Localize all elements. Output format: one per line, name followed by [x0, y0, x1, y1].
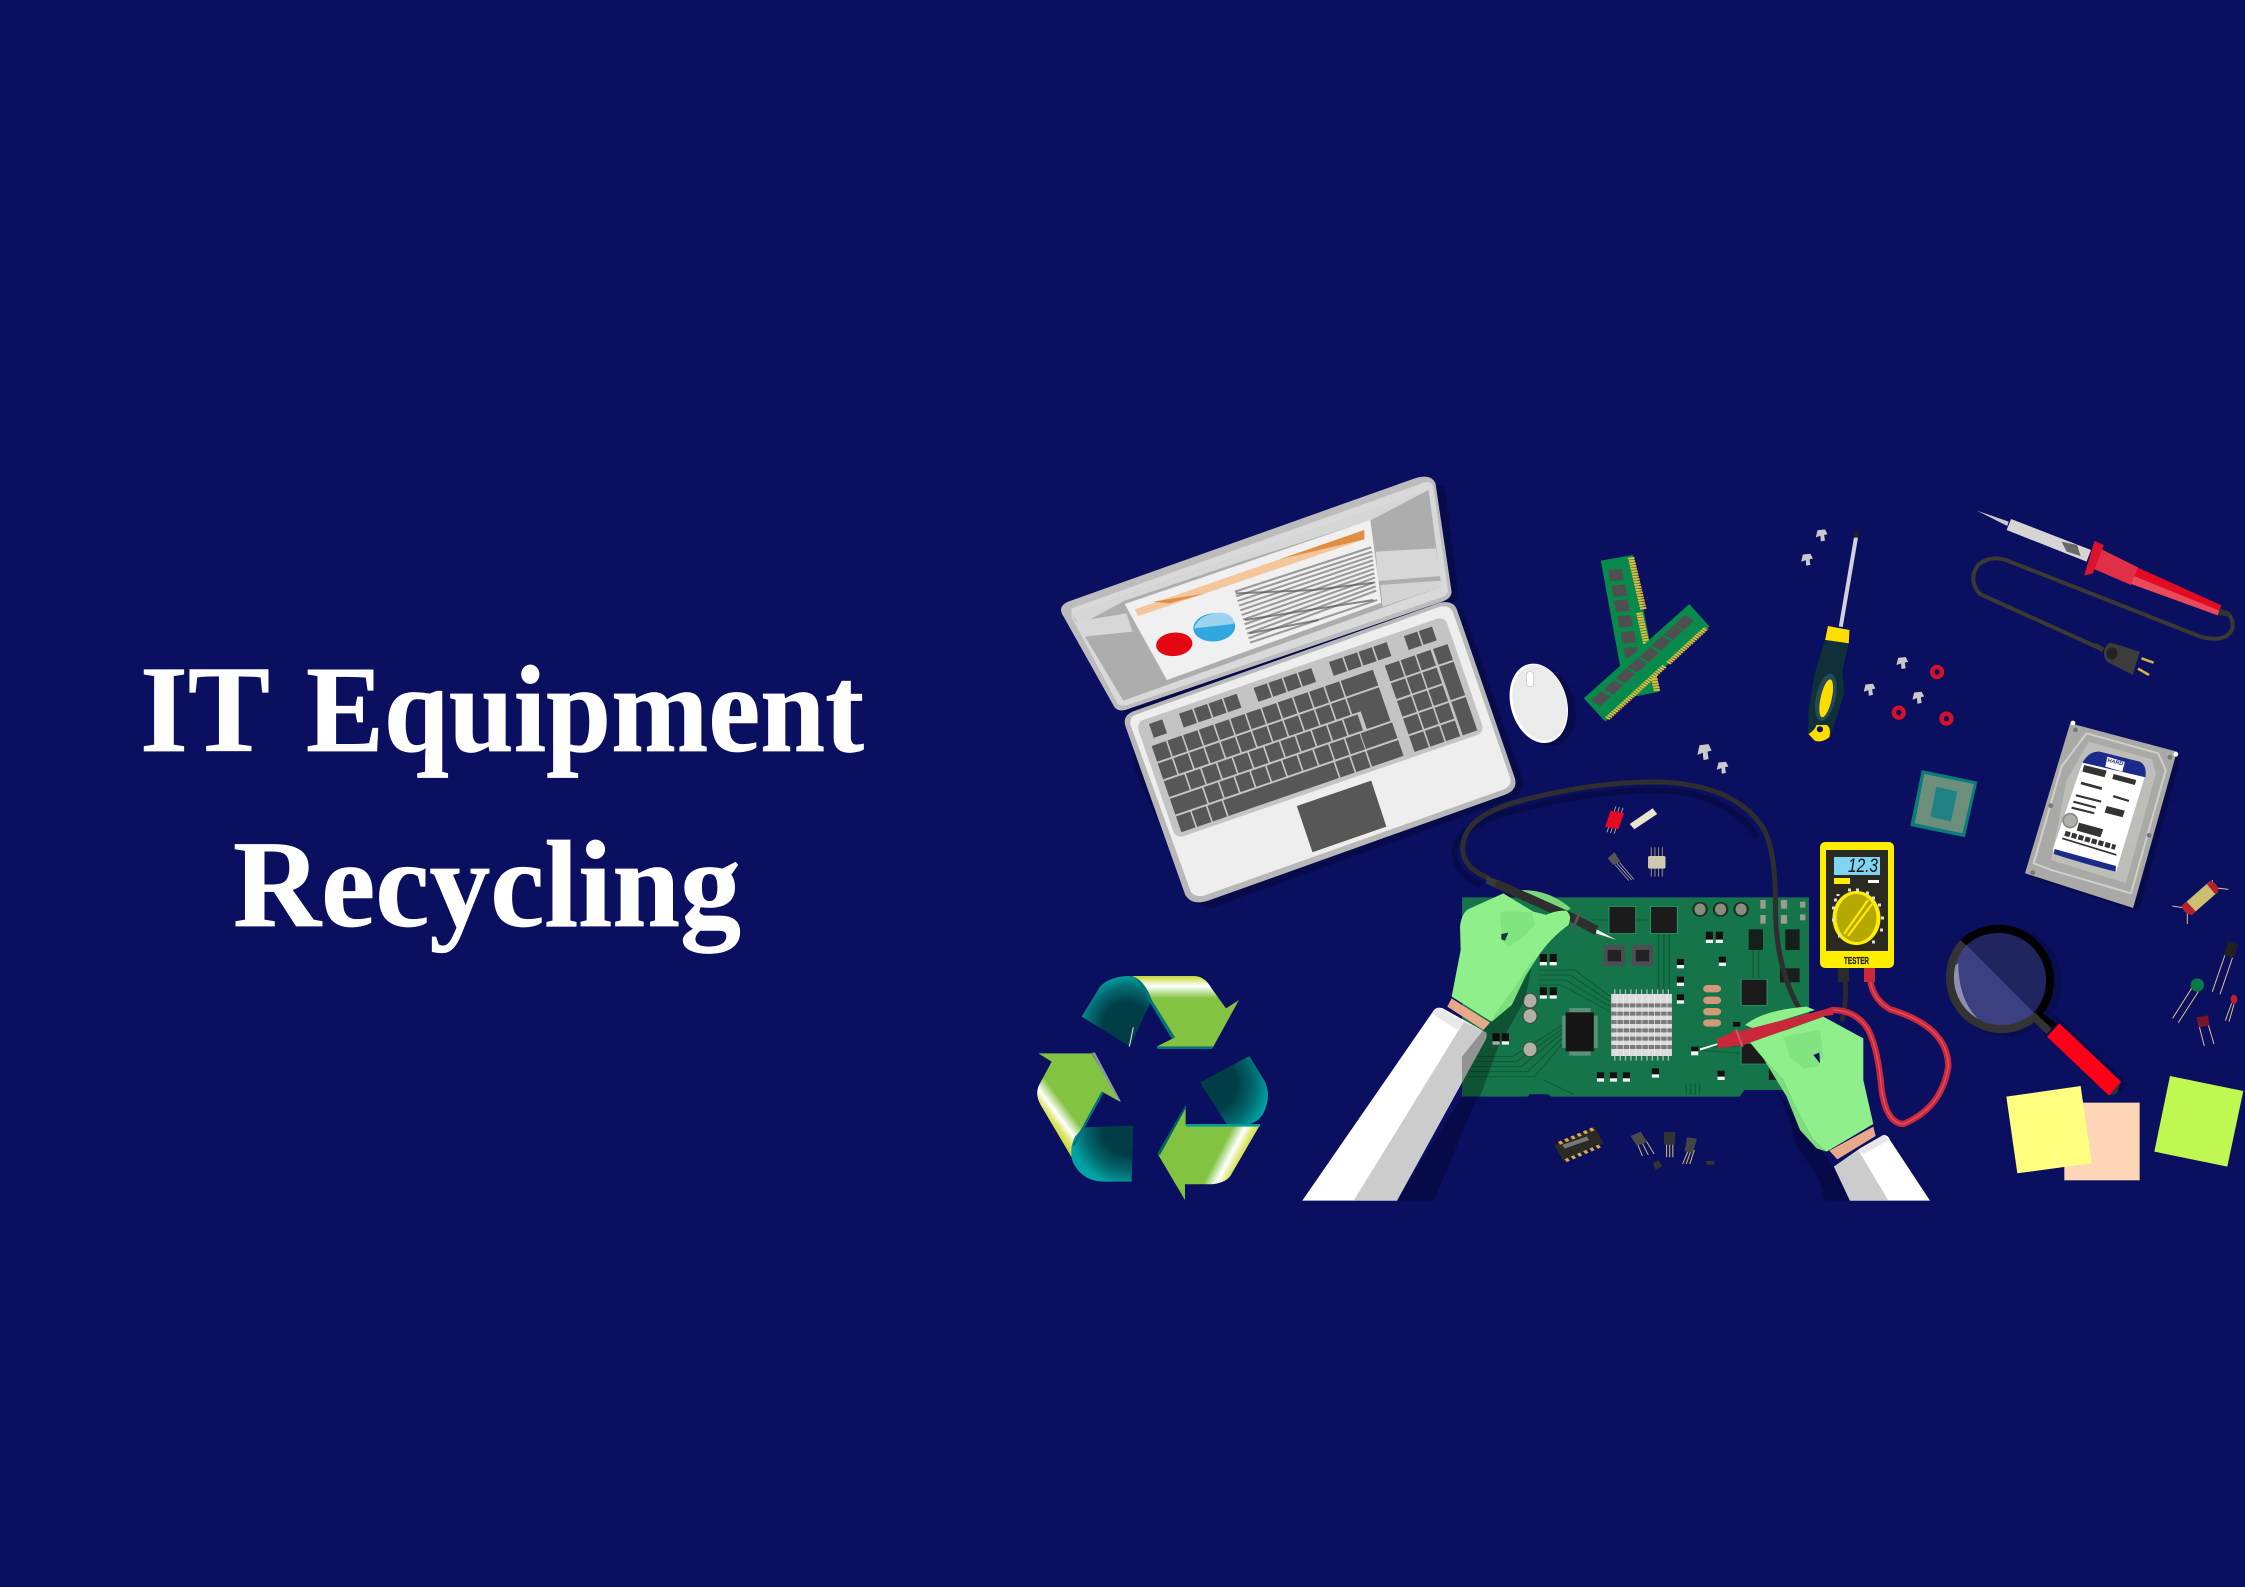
- glove gap: [1501, 933, 1508, 941]
- sticky note peach: [2064, 1103, 2140, 1180]
- laptop: [1061, 477, 1524, 908]
- glove side shading: [1763, 1058, 1827, 1152]
- resistors: [1703, 985, 1721, 1027]
- soldering iron cable: [1973, 558, 2233, 647]
- meter selector marks: [1832, 890, 1884, 942]
- left sleeve: [1302, 1007, 1487, 1201]
- main processor: [1562, 1008, 1598, 1056]
- loose components above board: [1603, 744, 1712, 881]
- laptop lid: [1061, 477, 1452, 710]
- drive screws: [2030, 728, 2172, 875]
- keyboard key rows: [1154, 657, 1459, 824]
- function key row: [1151, 633, 1434, 731]
- black probe: [1486, 876, 1617, 940]
- trackpad: [1297, 781, 1386, 852]
- laptop, mouse, RAM and small parts: [1061, 477, 1712, 908]
- red component: [1603, 806, 1626, 834]
- glove fingertip: [1537, 911, 1570, 942]
- drive spindle: [2063, 814, 2077, 828]
- wrist: [1447, 998, 1490, 1030]
- black cable: [1463, 782, 1800, 1010]
- screws: [1698, 529, 1924, 774]
- red washers: [1894, 667, 1951, 724]
- glove back finger: [1522, 890, 1571, 913]
- cable shadow: [1455, 790, 1758, 885]
- PCB and components: [1302, 782, 1809, 1201]
- SMD parts: [1492, 932, 1740, 1078]
- glove back finger: [1745, 1007, 1815, 1028]
- screwdriver: [1808, 532, 1859, 741]
- DIP chip: [1555, 1127, 1604, 1162]
- title: IT: [140, 641, 270, 778]
- right arm shadow: [1777, 1090, 1850, 1201]
- title: Recycling: [233, 816, 741, 954]
- connectors top right: [1760, 900, 1805, 924]
- red tester lead: [1832, 970, 1948, 1124]
- transistor: [1608, 852, 1634, 881]
- ceramic capacitor: [2197, 1015, 2214, 1046]
- glove palm: [1452, 893, 1570, 1022]
- glove palm: [1745, 1017, 1873, 1152]
- sticky note yellow: [2006, 1086, 2092, 1173]
- hard drive: [2025, 721, 2181, 912]
- RAM stick rear: [1601, 555, 1660, 698]
- magnifier, notes and components: [1950, 880, 2243, 1180]
- right hand: [1700, 967, 1948, 1201]
- transistor group: [1630, 1132, 1714, 1170]
- drive label: HARD: [2107, 758, 2124, 768]
- keyboard bed: [1136, 616, 1485, 839]
- sticky note green: [2154, 1076, 2243, 1167]
- mouse: [1503, 661, 1582, 749]
- screws: [1697, 744, 1712, 760]
- meter label: TESTER: [1844, 955, 1869, 967]
- board shadow of left hand: [1462, 967, 1532, 1097]
- left arm shadow on table: [1397, 1097, 1477, 1201]
- memory chips: [1609, 907, 1767, 1064]
- heat sink: [1611, 989, 1672, 1061]
- chip: [1648, 847, 1665, 877]
- glove gap: [1813, 1053, 1820, 1063]
- power plug: [2095, 642, 2154, 675]
- icon: recycling symbol: [1037, 976, 1268, 1200]
- RAM modules: [1584, 555, 1710, 722]
- left hand: [1447, 876, 1617, 1097]
- red probe: [1700, 1007, 1833, 1051]
- wrist: [1829, 1127, 1876, 1159]
- board traces: [1467, 920, 1759, 1095]
- sockets: [1604, 945, 1653, 966]
- drive label: [2053, 752, 2146, 872]
- keyboard: [1136, 616, 1485, 839]
- magnifying glass: [1950, 927, 2127, 1096]
- meter dial: [1832, 891, 1880, 945]
- RAM stick front: [1584, 604, 1710, 722]
- right sleeve: [1834, 1135, 1930, 1201]
- fuse: [1630, 808, 1657, 829]
- red LED: [2225, 995, 2237, 1022]
- multimeter: [1820, 842, 1894, 982]
- small ICs: [1749, 929, 1800, 1080]
- laptop base: [1125, 602, 1516, 902]
- loose chips below the board: [1555, 1127, 1714, 1170]
- soldering iron: [1977, 511, 2230, 617]
- tester black lead: [1842, 967, 1845, 1022]
- glove side shading: [1492, 958, 1537, 1022]
- title: Equipment: [306, 641, 864, 778]
- wide keys: [1152, 644, 1477, 832]
- electrolytic capacitors: [1523, 993, 1537, 1057]
- capacitor: [2172, 880, 2228, 924]
- capacitors top: [1693, 903, 1748, 916]
- glove inner fold: [1783, 1030, 1823, 1068]
- meter display: 12.3: [1848, 856, 1878, 877]
- CPU: [1910, 770, 1977, 837]
- green capacitor: [2173, 978, 2204, 1023]
- screen document: [1125, 520, 1381, 680]
- circuit board: [1462, 897, 1809, 1097]
- tools, drive and CPU: [1698, 511, 2233, 912]
- title: [140, 641, 864, 954]
- transistor black: [2212, 941, 2238, 994]
- meter lead sockets: [1838, 968, 1875, 982]
- glove inner fold: [1500, 912, 1535, 947]
